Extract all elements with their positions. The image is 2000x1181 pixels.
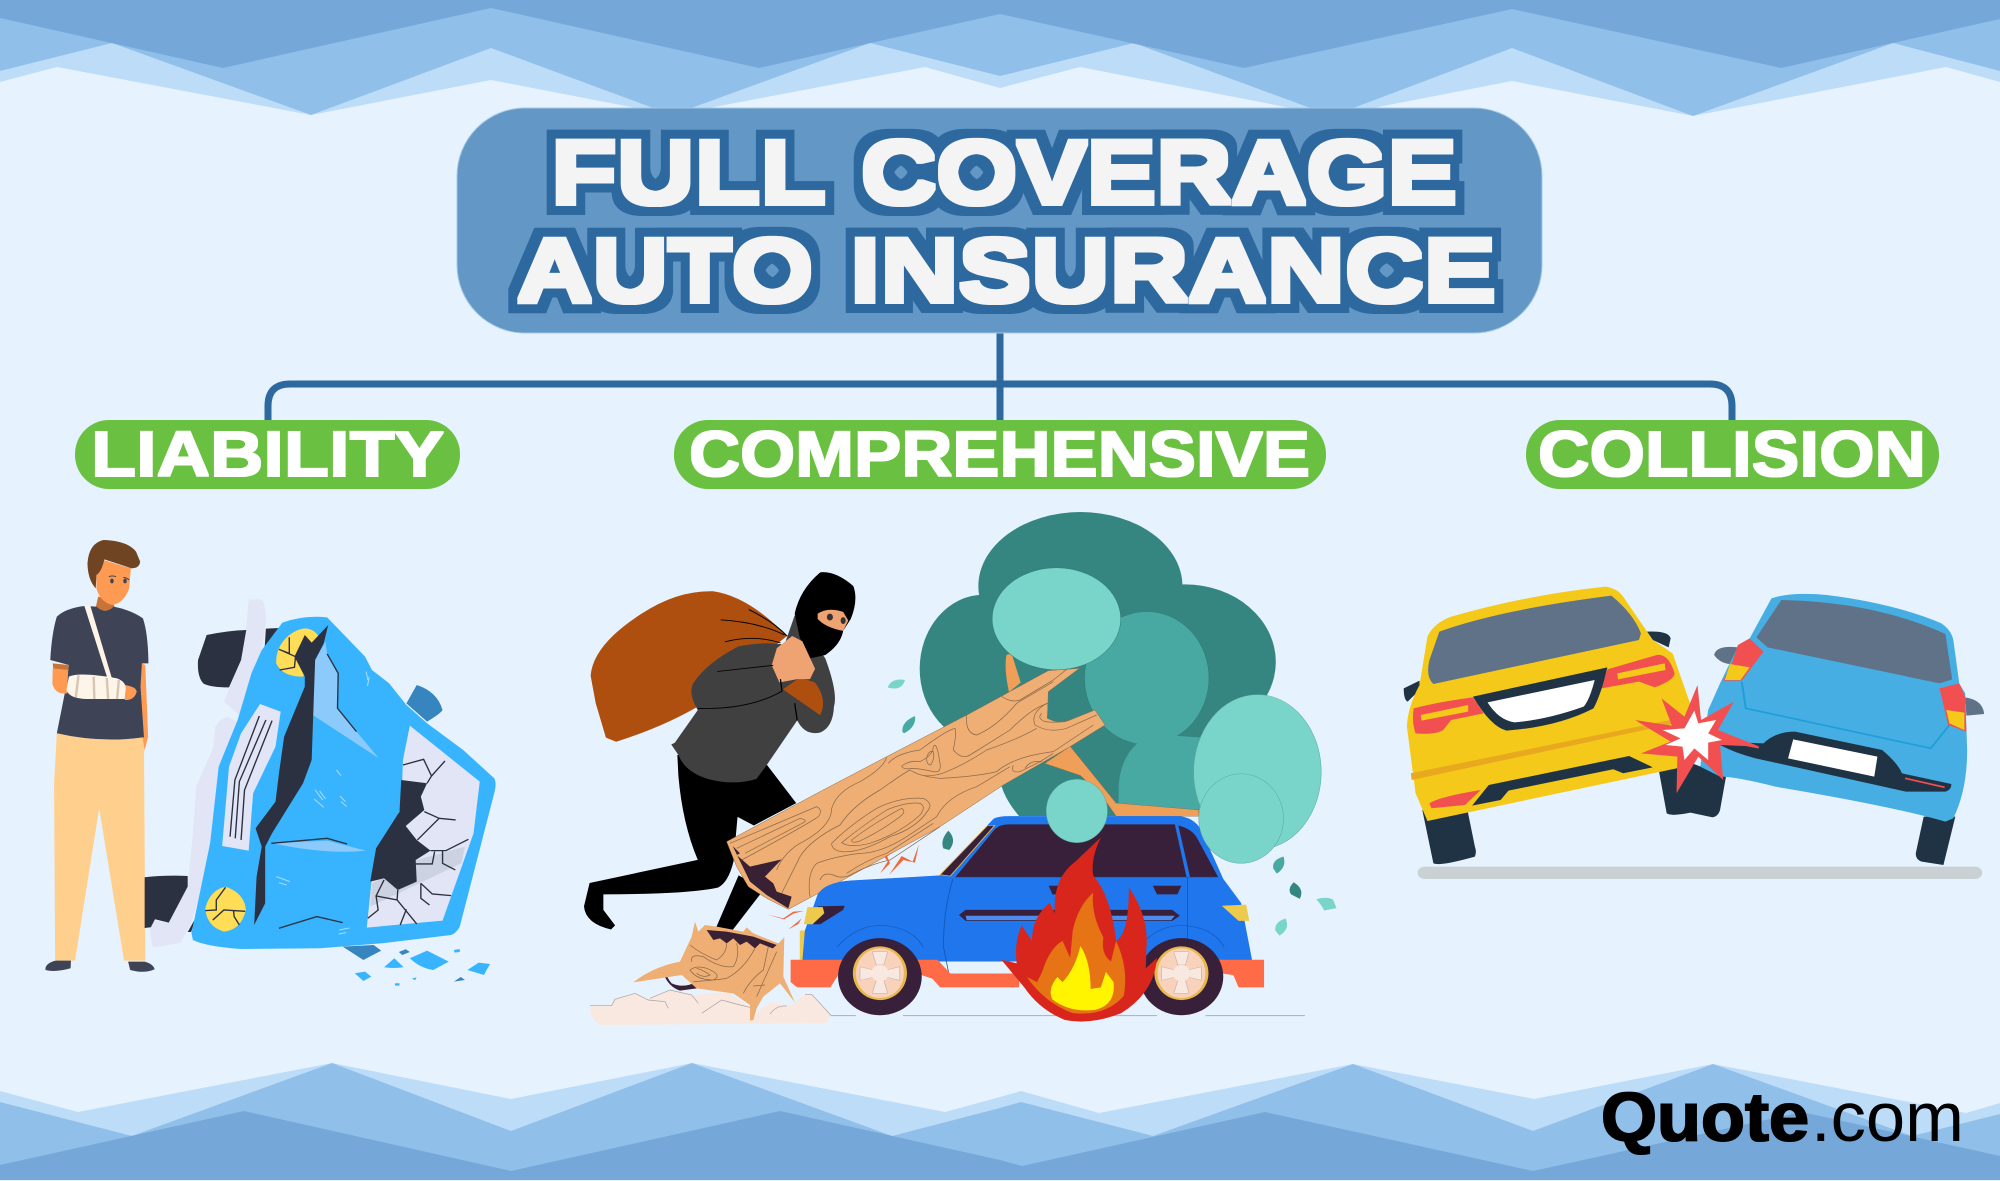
man with arm in sling xyxy=(45,540,155,972)
title text: COVERAGE xyxy=(861,122,1457,222)
fire xyxy=(1001,838,1157,1022)
illustration: two colliding cars xyxy=(1404,587,1984,879)
title text: FULL xyxy=(551,122,826,222)
label: collision: COLLISION xyxy=(1538,418,1926,490)
logo: Quote.com: Quote xyxy=(1601,1078,1809,1156)
illustration: thief, fallen tree, car fire xyxy=(584,512,1337,1025)
tires xyxy=(1422,763,1955,865)
bottom wave band xyxy=(0,1063,2000,1180)
blue car xyxy=(791,816,1264,1015)
fallen trunk xyxy=(727,668,1105,909)
label: comprehensive: COMPREHENSIVE xyxy=(689,418,1310,490)
ground line xyxy=(830,1014,1305,1017)
rear wheel xyxy=(1140,938,1223,1015)
logo: Quote.com xyxy=(1601,1078,1964,1156)
foliage in front of car xyxy=(1046,695,1321,863)
tree crown xyxy=(920,512,1276,816)
sparks and leaves near trunk xyxy=(767,679,953,929)
top wave band xyxy=(0,0,2000,116)
falling leaves right xyxy=(1273,856,1337,936)
lower branch xyxy=(1045,746,1199,816)
title text: INSURANCE xyxy=(850,220,1496,320)
upper branch xyxy=(1006,653,1021,692)
front wheel xyxy=(838,938,922,1015)
title pill xyxy=(457,108,1542,333)
title text: AUTO xyxy=(517,220,813,320)
illustration: injured man and crashed car xyxy=(45,540,496,986)
thief xyxy=(584,572,855,932)
impact burst xyxy=(1635,685,1760,793)
ground shadow xyxy=(1418,867,1982,879)
connector lines xyxy=(268,333,1732,422)
car debris xyxy=(355,949,490,986)
yellow car xyxy=(1404,587,1696,821)
blue car xyxy=(1700,594,1984,822)
snow and tree stump xyxy=(590,922,831,1025)
overturned blue car xyxy=(145,599,496,986)
top foliage highlight xyxy=(992,568,1121,670)
label: liability: LIABILITY xyxy=(91,418,444,490)
logo: Quote.com: .com xyxy=(1811,1078,1964,1156)
title text xyxy=(517,122,1496,320)
